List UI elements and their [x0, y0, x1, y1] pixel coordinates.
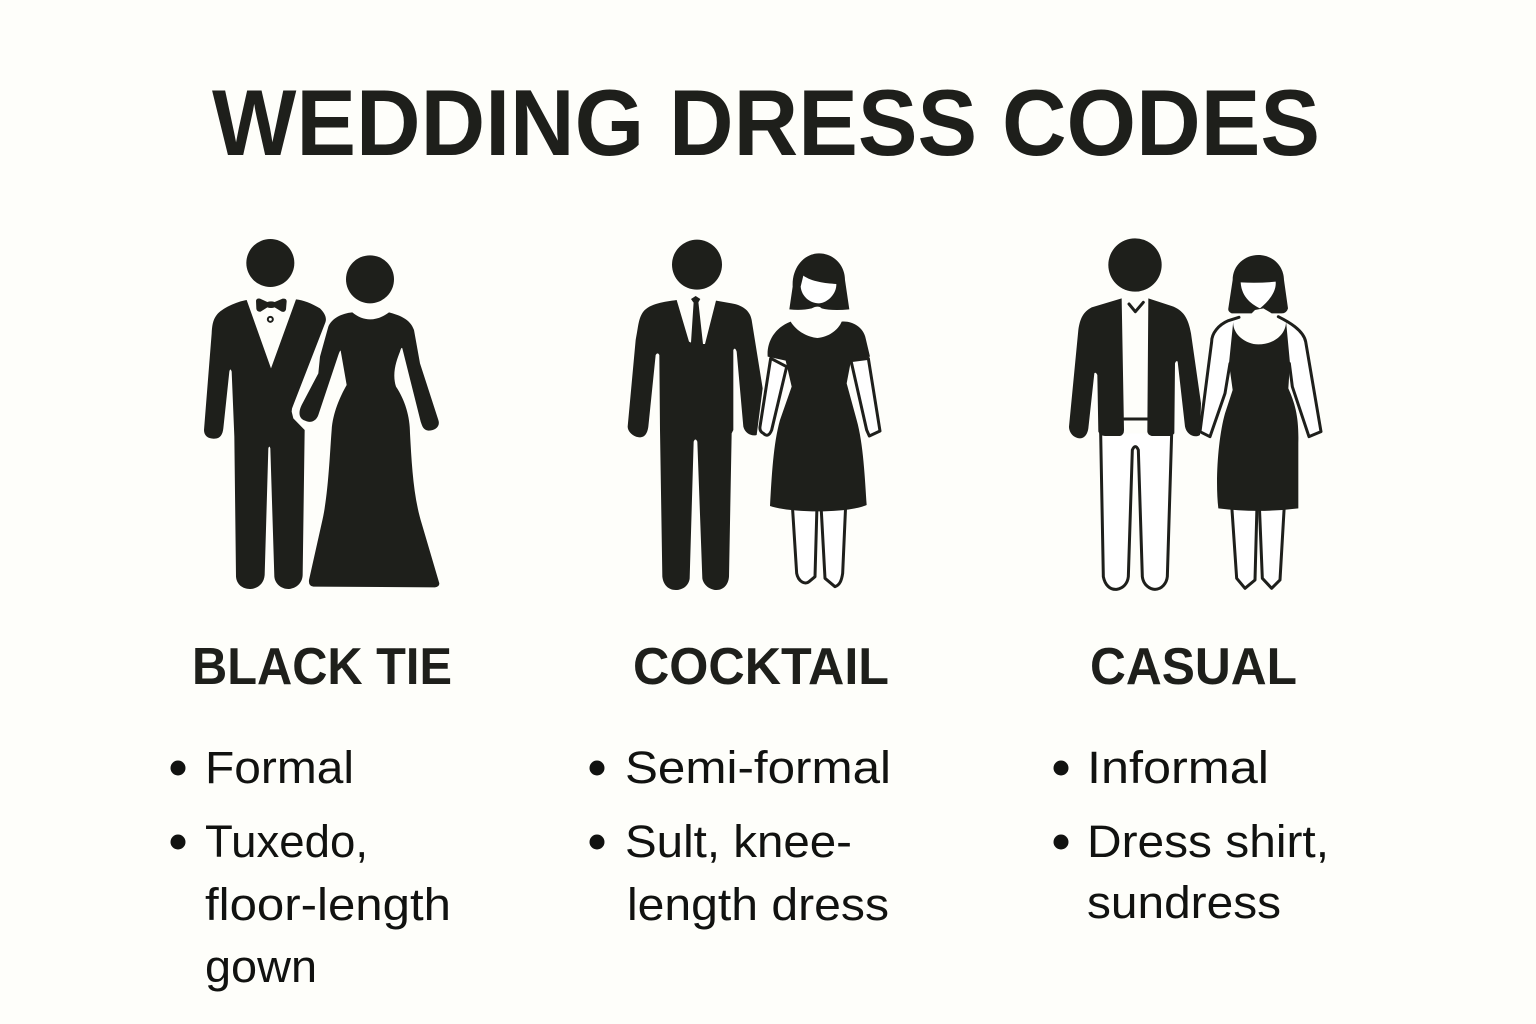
icon: casual couple: [1069, 238, 1321, 589]
title: WEDDING DRESS CODES: [212, 70, 1320, 175]
figure: man in open jacket: [1069, 238, 1201, 589]
bullet list: casual: sundress: [1087, 877, 1281, 928]
figure: woman in knee-length dress: [760, 253, 880, 587]
bullet list: black tie: Formal: [205, 742, 354, 793]
bullet list: cocktail: length dress: [627, 879, 889, 930]
figure: woman in floor-length gown: [299, 255, 439, 587]
bullet list: black tie: floor-length: [205, 879, 451, 930]
bullet list: black tie: gown: [205, 941, 317, 992]
bullet list: casual: [1054, 742, 1329, 928]
bullet list: black tie: Tuxedo,: [205, 816, 368, 867]
heading: casual: CASUAL: [1090, 638, 1297, 696]
panel: black tie: [170, 239, 452, 992]
heading: cocktail: COCKTAIL: [633, 638, 889, 696]
bullet list: black tie: [170, 742, 451, 992]
bullet list: casual: Informal: [1087, 742, 1269, 793]
heading: black tie: BLACK TIE: [192, 638, 452, 696]
figure: man in suit: [628, 240, 763, 590]
bullet list: cocktail: [590, 742, 891, 930]
figure: man in tuxedo: [204, 239, 326, 589]
bullet list: casual: Dress shirt,: [1087, 816, 1329, 867]
panel: cocktail: [590, 240, 891, 930]
icon: cocktail couple: [628, 240, 880, 590]
panel: casual: [1054, 238, 1329, 928]
bullet list: cocktail: Semi-formal: [625, 742, 891, 793]
figure: woman in sundress: [1200, 255, 1321, 588]
icon: black tie couple: [204, 239, 439, 589]
bullet list: cocktail: Sult, knee-: [625, 816, 852, 867]
